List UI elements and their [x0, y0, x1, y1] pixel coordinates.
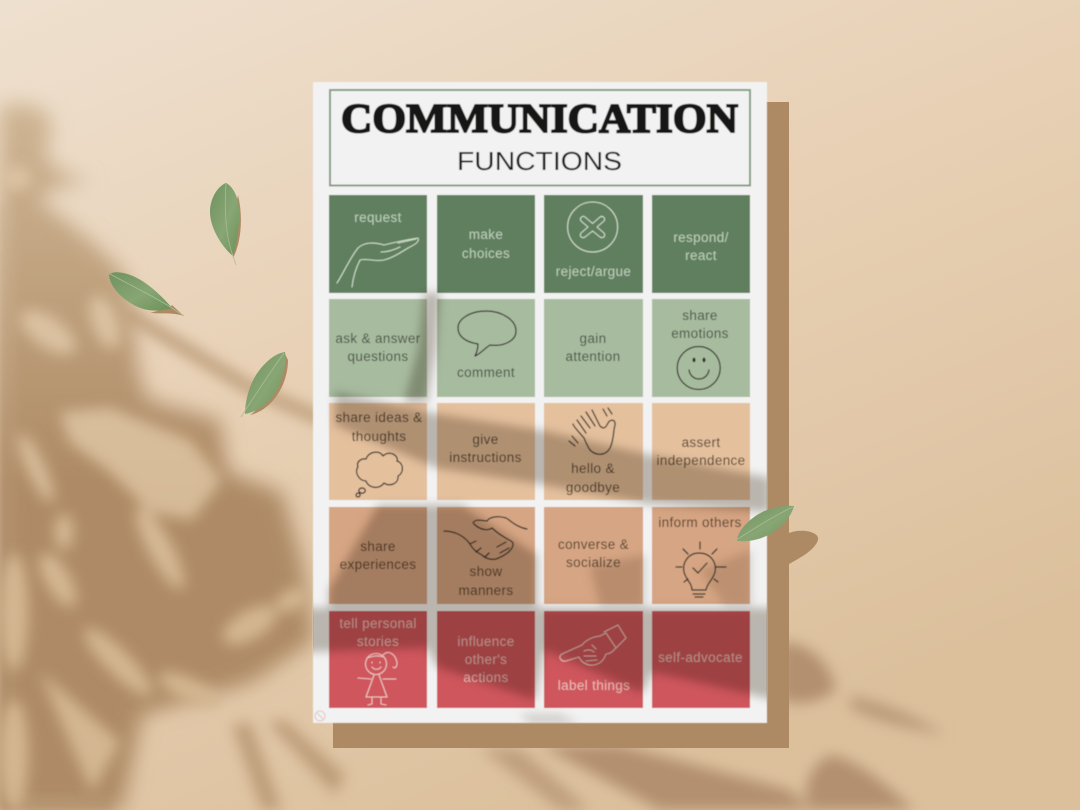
- icon: waving hand: [569, 408, 615, 454]
- leaf: middle: [109, 272, 184, 316]
- wall shadow: edge reinforcement bottom: [0, 796, 112, 810]
- icon: light bulb with check: [676, 542, 726, 597]
- tile: influence other's actions: other's: [465, 652, 507, 667]
- tile: converse & socialize: socialize: [566, 555, 621, 570]
- tile: gain attention: gain: [580, 331, 606, 346]
- tile: make choices: choices: [462, 246, 510, 261]
- icon: pointing hand: [560, 625, 626, 665]
- tile: hello & goodbye: goodbye: [566, 480, 620, 495]
- title box: [330, 90, 750, 186]
- tile: influence other's actions: [437, 611, 535, 708]
- poster: [313, 82, 767, 723]
- wall shadow: branch strand: [125, 312, 335, 425]
- tile: share experiences: experiences: [340, 557, 416, 572]
- icon: speech bubble: [458, 311, 516, 356]
- tile: hello & goodbye: hello &: [571, 461, 615, 476]
- tile: show manners: show: [470, 564, 502, 579]
- poster drop shadow: [333, 102, 789, 748]
- icon: x in circle: [568, 202, 618, 252]
- tile: make choices: make: [469, 227, 503, 242]
- tile: share experiences: share: [360, 539, 396, 554]
- tile: assert independence: assert: [682, 435, 720, 450]
- tile: converse & socialize: [544, 507, 643, 604]
- tile: share emotions: share: [682, 308, 718, 323]
- tile: label things: [544, 611, 643, 708]
- tile: respond/react: react: [685, 248, 717, 263]
- tile: reject/argue: reject/argue: [556, 264, 631, 279]
- tile: ask & answer questions: [329, 299, 427, 397]
- tile: give instructions: [437, 403, 535, 500]
- tile: share ideas & thoughts: thoughts: [352, 429, 406, 444]
- icon: open hand: [337, 238, 418, 287]
- icon: handshake: [444, 517, 527, 559]
- tile: request: request: [354, 210, 402, 225]
- tile: reject/argue: [544, 195, 643, 293]
- tile: self-advocate: [652, 611, 750, 708]
- icon: thought cloud: [356, 452, 402, 497]
- tile: ask & answer questions: questions: [348, 349, 408, 364]
- leaf: on poster edge: [733, 506, 794, 542]
- leaf 4 cast shadow on wall: [789, 531, 818, 564]
- heading: functions: FUNCTIONS: [457, 146, 622, 176]
- tile: assert independence: independence: [656, 453, 746, 468]
- tile: request: [329, 195, 427, 293]
- tile: tell personal stories: stories: [357, 634, 399, 649]
- heading: communication: COMMUNICATION: [341, 95, 738, 141]
- leaf: upper: [210, 183, 241, 265]
- tile: assert independence: [652, 403, 750, 500]
- wall shadow: lower left streaks: [232, 720, 345, 810]
- tile: tell personal stories: tell personal: [339, 616, 417, 631]
- tile: give instructions: give: [472, 432, 499, 447]
- tile: show manners: [437, 507, 535, 604]
- tile: self-advocate: self-advocate: [658, 650, 743, 665]
- tile: share emotions: [652, 299, 750, 397]
- tile: comment: [437, 299, 535, 397]
- tile: share emotions: emotions: [671, 326, 729, 341]
- watermark logo: [315, 711, 325, 721]
- tile: share ideas & thoughts: share ideas &: [335, 410, 423, 425]
- tile: influence other's actions: actions: [463, 670, 509, 685]
- leaf: lower: [241, 352, 288, 417]
- tile: inform others: inform others: [658, 515, 742, 530]
- tile: gain attention: attention: [566, 349, 620, 364]
- tile: share experiences: [329, 507, 427, 604]
- wall shadow: light gaps in foliage: [0, 166, 313, 810]
- poster foliage shadows: [305, 293, 775, 724]
- icon: smiley: [677, 346, 720, 390]
- tile: ask & answer questions: ask & answer: [335, 331, 421, 346]
- tile: converse & socialize: converse &: [558, 537, 629, 552]
- tile: respond/react: respond/: [673, 230, 729, 245]
- tile: hello & goodbye: [544, 403, 643, 500]
- tile: make choices: [437, 195, 535, 293]
- wall shadow: foliage lower right: [480, 642, 945, 810]
- tile: inform others: [652, 507, 750, 604]
- tile: share ideas & thoughts: [329, 403, 427, 500]
- wall shadow: edge reinforcement left: [0, 205, 12, 810]
- tile: gain attention: [544, 299, 643, 397]
- tile: give instructions: instructions: [449, 450, 522, 465]
- tile: influence other's actions: influence: [457, 634, 515, 649]
- tile: comment: comment: [457, 365, 515, 380]
- tile: label things: label things: [558, 678, 630, 693]
- tile: show manners: manners: [459, 583, 513, 598]
- icon: stick girl: [358, 653, 397, 705]
- tile: respond/react: [652, 195, 750, 293]
- tile: tell personal stories: [329, 611, 427, 708]
- wall shadow: main foliage left: [0, 105, 314, 810]
